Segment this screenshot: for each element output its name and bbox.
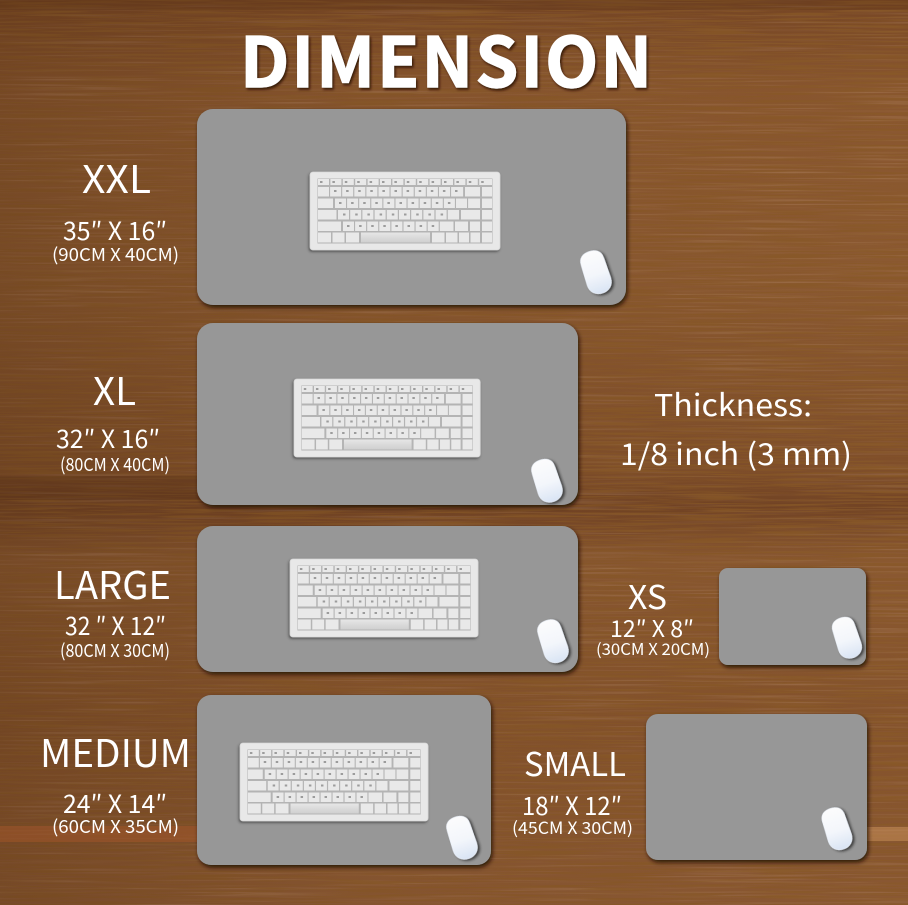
mat surface: [719, 568, 866, 665]
label: XL size: 32″ X 16″: [56, 420, 160, 456]
label: XS size: XS: [628, 571, 667, 619]
label: SMALL size: 18″ X 12″: [522, 787, 622, 823]
mat surface: [197, 695, 491, 865]
icon: mouse: [577, 248, 614, 297]
label: MEDIUM size: 24″ X 14″: [63, 785, 167, 821]
icon: keyboard: [294, 379, 480, 457]
label: LARGE size: 32 ″ X 12″: [65, 607, 166, 643]
panel: SMALL mat: [646, 714, 867, 860]
icon: mouse: [443, 813, 480, 862]
icon: keyboard: [240, 743, 428, 821]
icon: mouse: [829, 614, 865, 661]
label: LARGE size: LARGE: [54, 555, 171, 610]
label: XS size: 12″ X 8″: [610, 610, 694, 644]
panel: XS mat: [719, 568, 866, 665]
label: SMALL size: (45CM X 30CM): [512, 814, 633, 839]
label: XL size: [56, 361, 170, 477]
label: XL size: (80CM X 40CM): [60, 451, 170, 477]
icon: keyboard: [310, 172, 500, 250]
label: LARGE size: (80CM X 30CM): [60, 637, 170, 663]
icon: keyboard: [290, 559, 478, 637]
panel: MEDIUM mat: [197, 695, 491, 865]
label: XS size: (30CM X 20CM): [596, 636, 710, 660]
thickness note: Thickness:: [654, 381, 812, 425]
label: SMALL size: [512, 738, 633, 839]
panel: XXL mat: [197, 109, 626, 305]
panel: LARGE mat: [197, 526, 578, 672]
label: MEDIUM size: [40, 723, 191, 839]
icon: mouse: [528, 456, 565, 505]
label: XXL size: XXL: [82, 149, 151, 204]
icon: mouse: [534, 617, 571, 666]
thickness note: 1/8 inch (3 mm): [620, 430, 852, 474]
mat surface: [197, 526, 578, 672]
label: XXL size: (90CM X 40CM): [52, 241, 179, 267]
label: XXL size: [52, 149, 179, 267]
mat surface: [197, 109, 626, 305]
label: LARGE size: [54, 555, 171, 663]
label: MEDIUM size: (60CM X 35CM): [52, 813, 179, 839]
label: XS size: [596, 571, 710, 660]
mat surface: [646, 714, 867, 860]
panel: XL mat: [197, 323, 578, 505]
thickness note: [620, 381, 852, 474]
label: MEDIUM size: MEDIUM: [40, 723, 191, 778]
mat surface: [197, 323, 578, 505]
title: DIMENSION: [240, 7, 652, 107]
label: SMALL size: SMALL: [524, 738, 626, 786]
label: XL size: XL: [93, 361, 136, 416]
icon: mouse: [819, 805, 855, 853]
label: XXL size: 35″ X 16″: [63, 212, 167, 248]
